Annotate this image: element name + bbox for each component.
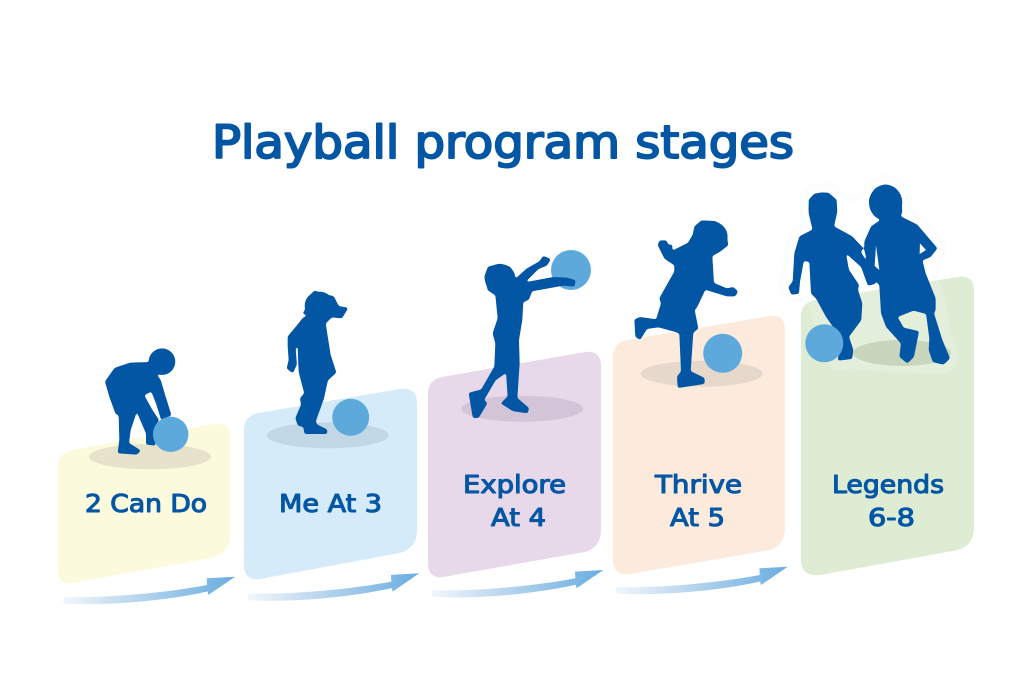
stage 5: Legends 6-8 <box>789 185 974 575</box>
label line 2: At 5 <box>670 503 725 532</box>
icon: ball <box>551 250 591 290</box>
halo behind boys <box>789 185 949 364</box>
stage 3: Explore At 4 <box>428 250 601 577</box>
icon: ball <box>332 399 369 436</box>
label: Legends <box>832 470 944 499</box>
label line 2: At 4 <box>491 503 546 532</box>
icon: ball <box>153 417 188 452</box>
panel re-tint under halo <box>801 277 974 400</box>
panel: Me At 3 <box>244 389 417 579</box>
arrow 4 <box>616 567 788 594</box>
panel: Thrive At 5 <box>613 316 785 574</box>
arrow 2 <box>247 573 419 601</box>
label: Me At 3 <box>279 489 382 518</box>
arrow 1 <box>63 577 235 604</box>
shadow ellipse <box>267 422 389 448</box>
icon: bending child <box>106 349 175 454</box>
arrow 3 <box>431 570 603 598</box>
shadow ellipse <box>89 444 211 469</box>
icon: two boys running <box>789 185 949 364</box>
arm gap right boy <box>920 243 926 254</box>
label line 2: 6-8 <box>868 503 915 532</box>
panel: 2 Can Do <box>58 424 230 583</box>
shadow ellipse <box>461 396 583 422</box>
panel: Legends 6-8 <box>801 277 974 575</box>
icon: ball <box>805 324 843 362</box>
label: Explore <box>463 470 566 499</box>
label: 2 Can Do <box>85 489 207 518</box>
title: Playball program stages <box>212 116 794 169</box>
stage 1: 2 Can Do <box>58 349 230 583</box>
shadow ellipse <box>853 340 951 366</box>
panel: Explore At 4 <box>428 352 601 577</box>
shadow ellipse <box>641 361 763 387</box>
stage 4: Thrive At 5 <box>613 221 785 574</box>
icon: child throwing <box>469 257 575 417</box>
label: Thrive <box>654 470 742 499</box>
stage 2: Me At 3 <box>244 291 417 579</box>
icon: girl kicking <box>635 221 737 387</box>
icon: standing girl <box>287 291 347 433</box>
arm gap between boys <box>875 245 879 270</box>
icon: ball <box>703 334 742 373</box>
